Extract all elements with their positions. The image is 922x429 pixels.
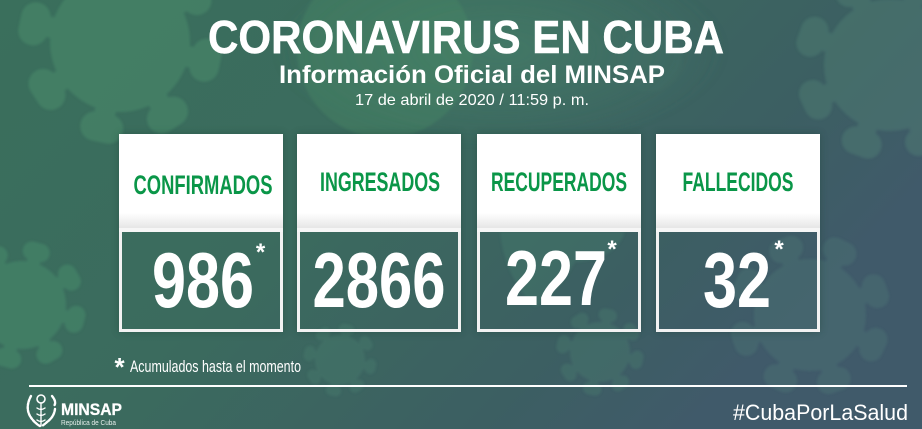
card: ingresados	[297, 134, 461, 332]
subtitle: Información Oficial del MINSAP	[279, 61, 665, 89]
logo tagline: República de Cuba	[61, 418, 117, 427]
date: 17 de abril de 2020 / 11:59 p. m.	[355, 92, 589, 109]
footer rule	[29, 385, 907, 387]
footnote	[114, 352, 301, 382]
icon: emblem	[28, 395, 55, 426]
footnote asterisk: *	[114, 352, 125, 382]
asterisk: *	[607, 236, 617, 263]
number: 986	[152, 236, 254, 324]
logo wordmark: MINSAP	[61, 400, 122, 419]
asterisk: *	[256, 239, 266, 266]
number: 2866	[312, 236, 446, 324]
number: 32	[703, 236, 771, 324]
asterisk: *	[774, 236, 784, 263]
footnote text: Acumulados hasta el momento	[130, 357, 301, 376]
card shadows	[119, 134, 820, 332]
label: FALLECIDOS	[682, 167, 794, 197]
title: CORONAVIRUS EN CUBA	[208, 11, 724, 63]
label: INGRESADOS	[320, 167, 440, 197]
MINSAP logo	[28, 395, 122, 427]
card: recuperados	[477, 134, 641, 332]
number: 227	[505, 234, 607, 322]
label: CONFIRMADOS	[134, 170, 272, 200]
label: RECUPERADOS	[491, 167, 627, 197]
hashtag: #CubaPorLaSalud	[733, 400, 908, 425]
card: fallecidos	[656, 134, 820, 332]
card: confirmados	[119, 134, 283, 332]
